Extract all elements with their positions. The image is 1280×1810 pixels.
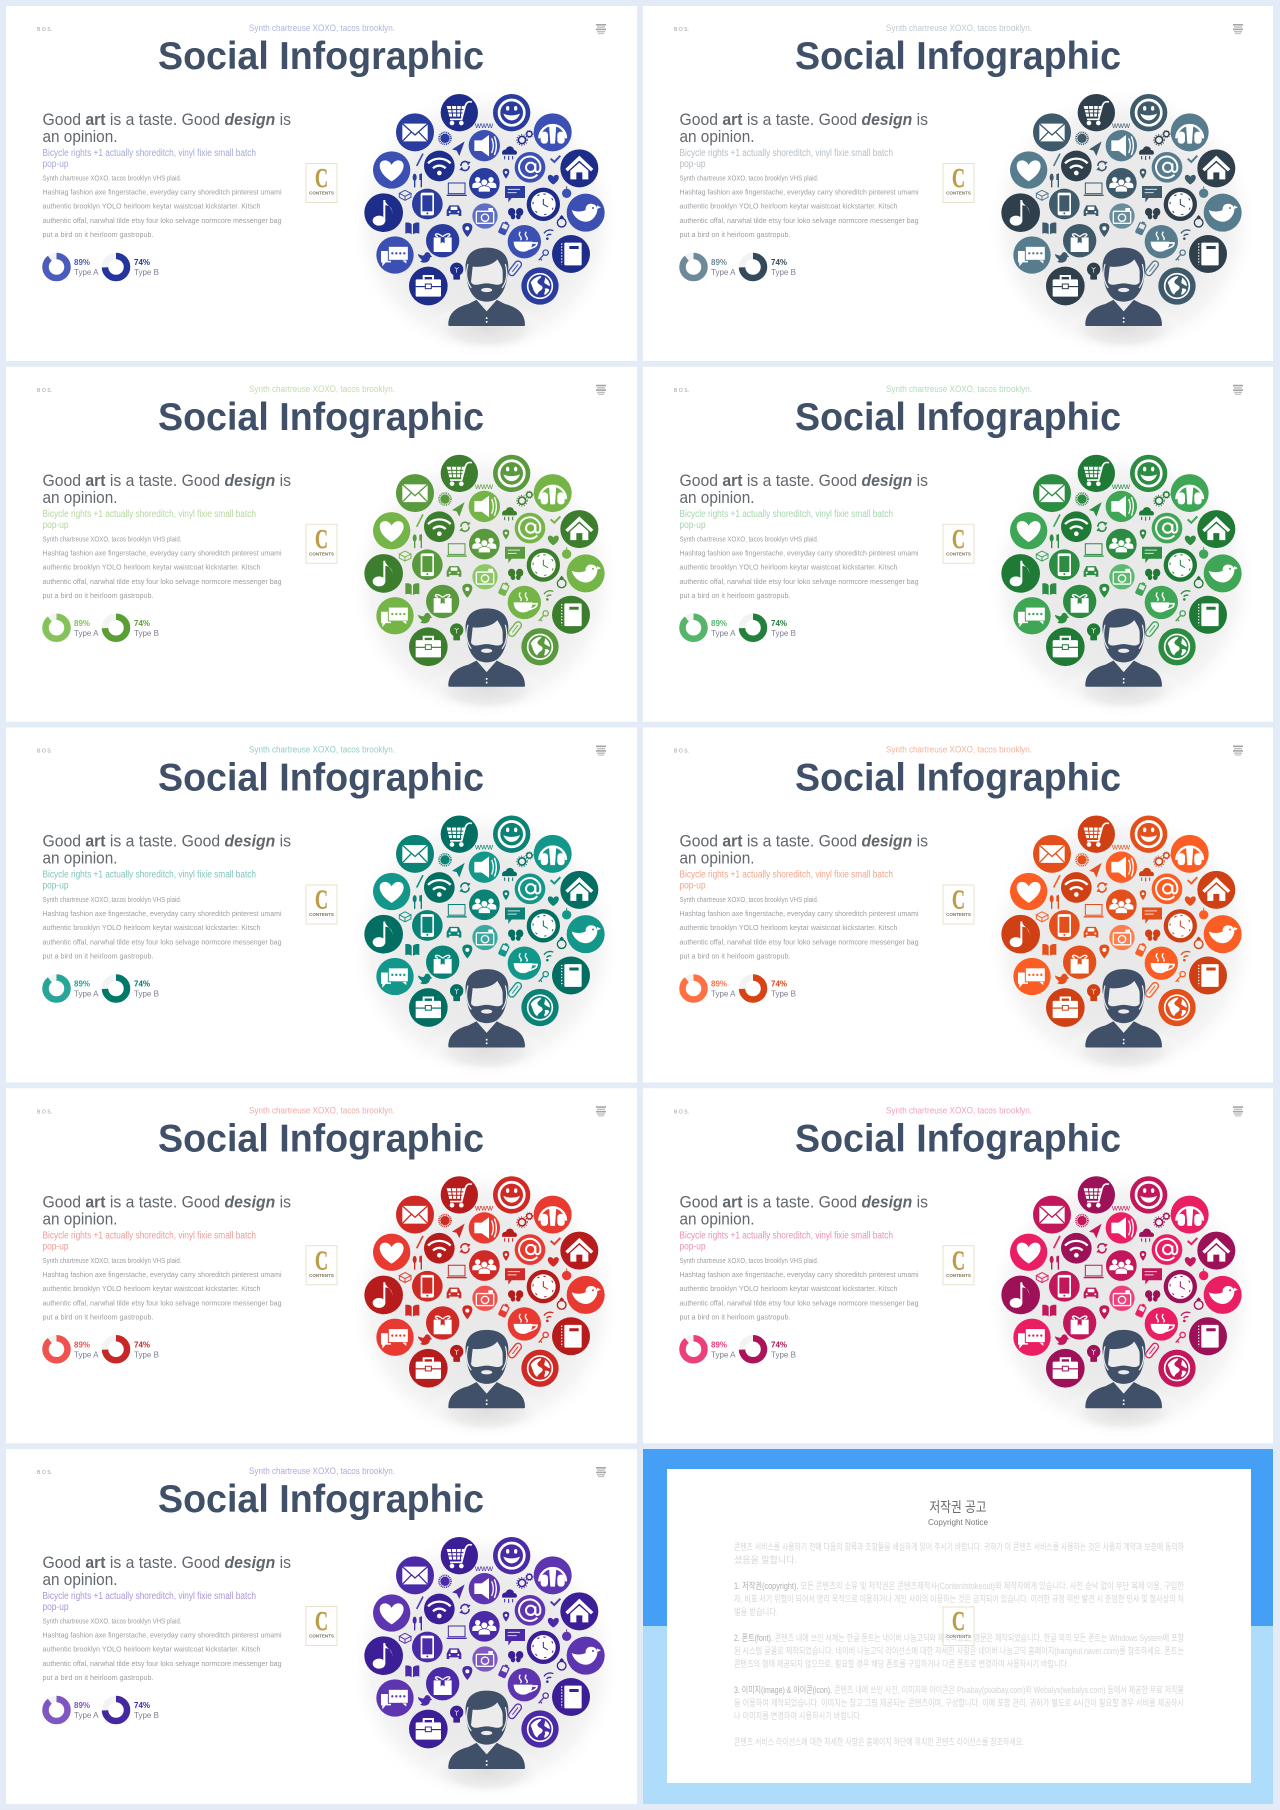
round icon badges	[1001, 1176, 1242, 1388]
donut chart: type A: Type A	[711, 629, 736, 638]
subtitle: Bicycle rights +1 actually shoreditch, vinyl fixie small batch	[42, 870, 256, 880]
body text: put a bird on it heirloom gastropub.	[42, 1312, 154, 1321]
donut chart: type A: Type A	[711, 1350, 736, 1359]
body text: Synth chartreuse XOXO, tacos brooklyn VHS plaid.	[42, 895, 182, 904]
tagline: Synth chartreuse XOXO, tacos brooklyn.	[886, 744, 1032, 754]
donut chart: type A	[46, 617, 99, 639]
lead text line 2: an opinion.	[42, 128, 118, 146]
icon cluster	[348, 87, 622, 360]
donut chart: type A	[682, 617, 736, 639]
donut chart: type B: Type B	[134, 1350, 159, 1359]
subtitle line 2: pop-up	[42, 1241, 69, 1252]
title: Social Infographic	[795, 1117, 1121, 1160]
title: Social Infographic	[158, 1478, 484, 1521]
title: Social Infographic	[158, 396, 484, 439]
donut chart: type B: 74%	[771, 258, 787, 267]
donut chart: type A	[682, 978, 736, 1000]
donut chart: type B	[742, 256, 796, 278]
body text: Synth chartreuse XOXO, tacos brooklyn VHS plaid.	[680, 534, 818, 543]
lead text: Good art is a taste. Good design is	[42, 472, 291, 490]
tagline: Synth chartreuse XOXO, tacos brooklyn.	[886, 1105, 1032, 1115]
body text: Synth chartreuse XOXO, tacos brooklyn VHS plaid.	[42, 534, 182, 543]
lead text line 2: an opinion.	[680, 850, 754, 868]
www label: www	[474, 1564, 493, 1573]
notice body text: 벌을 받습니다.	[734, 1607, 778, 1617]
soft shadow	[348, 87, 622, 360]
panel: purple	[6, 1449, 637, 1804]
subtitle line 2: pop-up	[680, 520, 706, 531]
round icon badges	[1001, 94, 1242, 305]
tagline: Synth chartreuse XOXO, tacos brooklyn.	[249, 1466, 395, 1476]
donut chart: type A	[46, 1338, 99, 1360]
logo: C	[315, 524, 328, 554]
donut chart: type B	[105, 978, 159, 1000]
body text	[680, 534, 919, 600]
body text: authentic brooklyn YOLO heirloom keytar waistcoat kickstarter. Kitsch	[42, 562, 260, 571]
donut chart: type B: 74%	[134, 258, 150, 267]
panel background	[6, 1449, 637, 1804]
soft shadow	[348, 1530, 622, 1803]
brand mark: B O S.	[37, 1109, 52, 1115]
title: Social Infographic	[795, 35, 1121, 78]
logo	[306, 884, 337, 924]
panel: red	[6, 1088, 637, 1443]
body text: Synth chartreuse XOXO, tacos brooklyn VHS plaid.	[42, 1256, 182, 1265]
brand mark: B O S.	[674, 388, 689, 394]
icon cluster	[348, 1169, 622, 1442]
panel background	[6, 1088, 637, 1443]
www label: www	[474, 842, 493, 852]
subtitle: Bicycle rights +1 actually shoreditch, vinyl fixie small batch	[42, 509, 256, 520]
notice body text: 1. 저작권(copyright). 모든 콘텐츠의 소유 및 저작권은 콘텐츠제작사(Contentstokeout)와 제작자에게 있습니다. 사전 승낙 없이 무단 복제 이용, 구입한	[734, 1580, 1184, 1591]
donut chart: type A: Type A	[74, 1711, 99, 1720]
body text: Synth chartreuse XOXO, tacos brooklyn VHS plaid.	[42, 1616, 182, 1626]
donut chart: type A: 89%	[711, 980, 727, 988]
lead text line 2: an opinion.	[42, 489, 118, 507]
title: Social Infographic	[795, 396, 1121, 439]
www label: www	[474, 1203, 493, 1212]
body text	[42, 1256, 282, 1321]
donut chart: type B: Type B	[771, 268, 796, 277]
panel: slate	[643, 6, 1273, 361]
subtitle: Bicycle rights +1 actually shoreditch, vinyl fixie small batch	[42, 1230, 256, 1241]
icon cluster	[985, 87, 1259, 360]
body text: authentic offal, narwhal tilde etsy four loko selvage normcore messenger bag	[42, 216, 282, 225]
round icon badges	[1001, 455, 1242, 666]
tagline: Synth chartreuse XOXO, tacos brooklyn.	[249, 23, 395, 33]
icon cluster	[985, 1169, 1259, 1442]
small icons	[1036, 1213, 1208, 1362]
round icon badges	[364, 1176, 605, 1388]
brand mark: B O S.	[674, 27, 689, 33]
lead text: Good art is a taste. Good design is	[680, 832, 928, 850]
body text: Hashtag fashion axe fingerstache, everyday carry shoreditch pinterest umami	[680, 548, 919, 557]
body text: Hashtag fashion axe fingerstache, everyday carry shoreditch pinterest umami	[42, 1270, 282, 1279]
logo	[306, 1606, 337, 1646]
subtitle line 2: pop-up	[42, 520, 69, 531]
donut chart: type B: 74%	[771, 619, 787, 628]
icon: menu	[596, 1106, 606, 1116]
body text	[42, 895, 282, 960]
round icon badges	[364, 94, 605, 305]
icon: menu	[1233, 746, 1243, 756]
icon cluster	[985, 447, 1259, 721]
logo: CONTENTS	[309, 1273, 334, 1278]
white notice card	[667, 1469, 1251, 1783]
subtitle: Bicycle rights +1 actually shoreditch, vinyl fixie small batch	[42, 1591, 256, 1602]
body text: Hashtag fashion axe fingerstache, everyday carry shoreditch pinterest umami	[680, 1270, 919, 1279]
small icons	[399, 1573, 571, 1723]
notice subheading: Copyright Notice	[928, 1518, 989, 1527]
body text: Hashtag fashion axe fingerstache, everyday carry shoreditch pinterest umami	[42, 1630, 282, 1640]
subtitle line 2: pop-up	[680, 880, 706, 892]
logo: C	[315, 163, 328, 193]
soft shadow	[985, 87, 1259, 360]
brand mark: B O S.	[37, 27, 52, 33]
logo	[943, 884, 974, 924]
donut chart: type B: 74%	[134, 619, 150, 628]
soft shadow	[348, 447, 622, 721]
logo: CONTENTS	[946, 551, 971, 556]
logo: C	[315, 1245, 328, 1275]
subtitle line 2: pop-up	[42, 1602, 69, 1613]
www label: www	[1111, 121, 1130, 130]
lead text line 2: an opinion.	[42, 1571, 118, 1589]
icon: menu	[596, 746, 606, 756]
donut chart: type A: Type A	[74, 629, 99, 638]
lead text line 2: an opinion.	[680, 1210, 754, 1228]
donut chart: type A: 89%	[711, 1340, 727, 1349]
title: Social Infographic	[158, 1117, 484, 1160]
body text: put a bird on it heirloom gastropub.	[42, 230, 154, 239]
donut chart: type A: 89%	[74, 1701, 90, 1710]
small icons	[1036, 852, 1208, 1001]
round icon badges	[1001, 815, 1242, 1027]
title: Social Infographic	[795, 756, 1121, 800]
logo	[943, 163, 974, 202]
lead text: Good art is a taste. Good design is	[42, 111, 291, 129]
person avatar	[1085, 969, 1162, 1047]
www label: www	[474, 121, 493, 130]
panel: teal	[6, 728, 637, 1082]
donut chart: type B: 74%	[134, 1340, 150, 1349]
body text	[42, 1616, 282, 1682]
body text: authentic brooklyn YOLO heirloom keytar waistcoat kickstarter. Kitsch	[42, 1644, 260, 1654]
tagline: Synth chartreuse XOXO, tacos brooklyn.	[249, 744, 395, 754]
icon cluster	[348, 808, 622, 1081]
donut chart: type A	[46, 256, 99, 278]
body text: Hashtag fashion axe fingerstache, everyday carry shoreditch pinterest umami	[680, 909, 919, 918]
small icons	[399, 852, 571, 1001]
body text: authentic offal, narwhal tilde etsy four loko selvage normcore messenger bag	[680, 216, 918, 225]
donut chart: type A: 89%	[74, 619, 90, 628]
soft shadow	[985, 447, 1259, 721]
donut chart: type A	[682, 1338, 736, 1360]
body text: Hashtag fashion axe fingerstache, everyday carry shoreditch pinterest umami	[42, 548, 282, 557]
panel background	[643, 6, 1273, 361]
logo: CONTENTS	[946, 1634, 971, 1639]
logo	[306, 524, 337, 563]
soft shadow	[985, 808, 1259, 1081]
title: Social Infographic	[158, 756, 484, 800]
donut chart: type A	[46, 1699, 99, 1721]
donut chart: type A: Type A	[74, 990, 99, 998]
donut chart: type B	[105, 1699, 159, 1721]
www label: www	[1111, 1203, 1130, 1212]
donut chart: type B: 74%	[134, 1701, 150, 1710]
donut chart: type A: Type A	[711, 268, 736, 277]
panel: copyright notice	[643, 1449, 1273, 1804]
donut chart: type B: Type B	[134, 1711, 159, 1720]
notice body text: 3. 이미지(image) & 아이콘(icon). 콘텐츠 내에 쓰인 사진, 이미지와 아이콘은 Pixabay(pixabay.com)와 Webalys(webalys.com) 등에서 제공한 무료 저작물	[734, 1684, 1184, 1695]
panel background	[6, 728, 637, 1082]
body text: Synth chartreuse XOXO, tacos brooklyn VHS plaid.	[42, 174, 182, 182]
body text: authentic offal, narwhal tilde etsy four loko selvage normcore messenger bag	[42, 1659, 282, 1668]
logo: C	[952, 163, 965, 193]
panel: pink	[643, 1088, 1273, 1443]
person avatar	[448, 969, 525, 1047]
round icon badges	[364, 1537, 605, 1748]
small icons	[399, 491, 571, 640]
body text: authentic offal, narwhal tilde etsy four loko selvage normcore messenger bag	[42, 938, 282, 946]
donut chart: type A: 89%	[711, 258, 727, 267]
notice body text: 콘텐츠의 형태 제공되지 않으므로, 필요할 경우 해당 폰트를 구입하거나 다른 폰트로 변경하여 사용하시기 바랍니다.	[734, 1658, 1069, 1669]
donut chart: type A: 89%	[74, 1340, 90, 1349]
round icon badges	[364, 455, 605, 666]
donut chart: type A: 89%	[74, 258, 90, 267]
logo: C	[315, 884, 328, 914]
panel background	[6, 6, 637, 361]
lead text line 2: an opinion.	[42, 850, 118, 868]
logo: CONTENTS	[309, 190, 334, 196]
logo	[306, 1245, 337, 1285]
brand mark: B O S.	[37, 388, 52, 394]
logo: CONTENTS	[946, 1273, 971, 1278]
panel: blue	[6, 6, 637, 361]
donut chart: type B	[105, 617, 159, 639]
donut chart: type B: Type B	[134, 629, 159, 638]
www label: www	[1111, 842, 1130, 852]
body text: Synth chartreuse XOXO, tacos brooklyn VHS plaid.	[680, 174, 818, 182]
icon cluster	[348, 447, 622, 721]
donut chart: type B: Type B	[771, 1350, 796, 1359]
lead text line 2: an opinion.	[42, 1210, 118, 1228]
body text	[42, 534, 282, 600]
small icons	[399, 130, 571, 280]
small icons	[1036, 491, 1208, 640]
body text: authentic brooklyn YOLO heirloom keytar waistcoat kickstarter. Kitsch	[42, 202, 260, 210]
logo: CONTENTS	[309, 551, 334, 556]
person avatar	[448, 608, 525, 687]
icon cluster	[348, 1530, 622, 1803]
donut chart: type B: Type B	[771, 629, 796, 638]
logo: CONTENTS	[309, 1634, 334, 1638]
body text: put a bird on it heirloom gastropub.	[42, 952, 154, 960]
blue frame top	[643, 1449, 1273, 1626]
icon cluster	[985, 808, 1259, 1081]
icon: menu	[596, 24, 606, 34]
lead text: Good art is a taste. Good design is	[42, 1193, 291, 1211]
subtitle: Bicycle rights +1 actually shoreditch, vinyl fixie small batch	[680, 148, 893, 159]
body text: authentic offal, narwhal tilde etsy four loko selvage normcore messenger bag	[680, 1298, 918, 1307]
panel: green	[643, 367, 1273, 722]
subtitle line 2: pop-up	[680, 1241, 706, 1252]
www label: www	[474, 482, 493, 491]
donut chart: type B: Type B	[771, 990, 796, 998]
panel background	[643, 728, 1273, 1082]
notice body text: 콘텐츠 서비스 라이선스에 대한 자세한 사항은 홈페이지 하단에 위치한 콘텐츠 라이선스를 참조하세요.	[734, 1736, 1024, 1747]
donut chart: type B	[105, 1338, 159, 1360]
notice body text: 셨음을 말합니다.	[734, 1554, 797, 1565]
donut chart: type A: 89%	[74, 980, 90, 988]
lead text: Good art is a taste. Good design is	[42, 1554, 291, 1572]
donut chart: type A	[46, 978, 99, 1000]
person avatar	[448, 1691, 525, 1769]
icon: menu	[596, 1467, 606, 1477]
body text: authentic brooklyn YOLO heirloom keytar waistcoat kickstarter. Kitsch	[680, 1284, 898, 1293]
icon: menu	[1233, 1106, 1243, 1116]
donut chart: type B	[742, 978, 796, 1000]
notice body text: 나 이미지를 변경하여 사용하시기 바랍니다.	[734, 1710, 862, 1721]
subtitle: Bicycle rights +1 actually shoreditch, vinyl fixie small batch	[680, 870, 893, 880]
body text: authentic brooklyn YOLO heirloom keytar waistcoat kickstarter. Kitsch	[42, 923, 260, 932]
body text: put a bird on it heirloom gastropub.	[680, 952, 790, 960]
body text: authentic offal, narwhal tilde etsy four loko selvage normcore messenger bag	[680, 938, 918, 946]
donut chart: type B	[105, 256, 159, 278]
lead text: Good art is a taste. Good design is	[680, 111, 928, 129]
subtitle: Bicycle rights +1 actually shoreditch, vinyl fixie small batch	[680, 509, 893, 520]
lead text: Good art is a taste. Good design is	[680, 472, 928, 490]
donut chart: type B: Type B	[134, 268, 159, 277]
donut chart: type B	[742, 1338, 796, 1360]
small icons	[1036, 130, 1208, 280]
logo	[306, 163, 337, 202]
body text: put a bird on it heirloom gastropub.	[680, 591, 790, 600]
subtitle: Bicycle rights +1 actually shoreditch, vinyl fixie small batch	[42, 148, 256, 159]
subtitle: Bicycle rights +1 actually shoreditch, vinyl fixie small batch	[680, 1230, 893, 1241]
donut chart: type A: Type A	[74, 268, 99, 277]
person avatar	[448, 1330, 525, 1408]
person avatar	[1085, 608, 1162, 687]
donut chart: type B: 74%	[771, 1340, 787, 1349]
panel background	[643, 1088, 1273, 1443]
brand mark: B O S.	[674, 1109, 689, 1115]
person avatar	[1085, 1330, 1162, 1408]
tagline: Synth chartreuse XOXO, tacos brooklyn.	[886, 384, 1032, 394]
body text: authentic offal, narwhal tilde etsy four loko selvage normcore messenger bag	[42, 1298, 282, 1307]
logo: C	[952, 1606, 965, 1636]
panel background	[6, 367, 637, 722]
donut chart: type A: Type A	[74, 1350, 99, 1359]
body text: put a bird on it heirloom gastropub.	[42, 591, 154, 600]
soft shadow	[985, 1169, 1259, 1442]
tagline: Synth chartreuse XOXO, tacos brooklyn.	[249, 1105, 395, 1115]
donut chart: type B: 74%	[134, 980, 150, 988]
logo: C	[315, 1606, 328, 1636]
subtitle line 2: pop-up	[42, 880, 69, 892]
icon: menu	[596, 385, 606, 395]
body text: authentic offal, narwhal tilde etsy four loko selvage normcore messenger bag	[42, 577, 282, 586]
donut chart: type B: 74%	[771, 980, 787, 988]
donut chart: type B: Type B	[134, 990, 159, 998]
lead text: Good art is a taste. Good design is	[42, 832, 291, 850]
body text: Hashtag fashion axe fingerstache, everyday carry shoreditch pinterest umami	[42, 909, 282, 918]
body text	[680, 895, 919, 960]
logo: CONTENTS	[946, 190, 971, 196]
logo	[943, 1245, 974, 1285]
logo	[943, 524, 974, 563]
icon: menu	[1233, 24, 1243, 34]
brand mark: B O S.	[37, 748, 52, 754]
body text: Synth chartreuse XOXO, tacos brooklyn VHS plaid.	[680, 895, 818, 904]
subtitle line 2: pop-up	[680, 159, 706, 170]
round icon badges	[364, 815, 605, 1027]
logo	[943, 1606, 974, 1646]
lead text: Good art is a taste. Good design is	[680, 1193, 928, 1211]
notice body text	[734, 1541, 1185, 1747]
logo: CONTENTS	[946, 912, 971, 917]
logo: C	[952, 524, 965, 554]
donut chart: type A: Type A	[711, 990, 736, 998]
logo: CONTENTS	[309, 912, 334, 917]
body text: Hashtag fashion axe fingerstache, everyday carry shoreditch pinterest umami	[680, 188, 919, 196]
notice heading: 저작권 공고	[930, 1499, 987, 1515]
light blue frame bottom	[643, 1626, 1273, 1804]
person avatar	[1085, 248, 1162, 326]
logo: C	[952, 884, 965, 914]
donut chart: type B	[742, 617, 796, 639]
lead text line 2: an opinion.	[680, 489, 754, 507]
www label: www	[1111, 482, 1130, 491]
body text	[42, 174, 282, 239]
panel: orange	[643, 728, 1273, 1082]
body text: Hashtag fashion axe fingerstache, everyday carry shoreditch pinterest umami	[42, 188, 282, 196]
tagline: Synth chartreuse XOXO, tacos brooklyn.	[249, 384, 395, 394]
body text: authentic brooklyn YOLO heirloom keytar waistcoat kickstarter. Kitsch	[680, 923, 898, 932]
title: Social Infographic	[158, 35, 484, 78]
panel background	[643, 367, 1273, 722]
body text: Synth chartreuse XOXO, tacos brooklyn VHS plaid.	[680, 1256, 818, 1265]
soft shadow	[348, 1169, 622, 1442]
logo: C	[952, 1245, 965, 1275]
subtitle line 2: pop-up	[42, 159, 69, 170]
panel: lime green	[6, 367, 637, 722]
body text: put a bird on it heirloom gastropub.	[680, 230, 790, 239]
icon: menu	[1233, 385, 1243, 395]
body text: authentic offal, narwhal tilde etsy four loko selvage normcore messenger bag	[680, 577, 918, 586]
donut chart: type A: 89%	[711, 619, 727, 628]
body text: put a bird on it heirloom gastropub.	[680, 1312, 790, 1321]
donut chart: type A	[682, 256, 736, 278]
brand mark: B O S.	[37, 1470, 52, 1476]
brand mark: B O S.	[674, 748, 689, 754]
lead text line 2: an opinion.	[680, 128, 754, 146]
body text: authentic brooklyn YOLO heirloom keytar waistcoat kickstarter. Kitsch	[680, 562, 898, 571]
body text: put a bird on it heirloom gastropub.	[42, 1673, 154, 1682]
body text	[680, 174, 919, 239]
body text: authentic brooklyn YOLO heirloom keytar waistcoat kickstarter. Kitsch	[42, 1284, 260, 1293]
tagline: Synth chartreuse XOXO, tacos brooklyn.	[886, 23, 1032, 33]
small icons	[399, 1213, 571, 1362]
person avatar	[448, 248, 525, 326]
body text: authentic brooklyn YOLO heirloom keytar waistcoat kickstarter. Kitsch	[680, 202, 898, 210]
body text	[680, 1256, 919, 1321]
soft shadow	[348, 808, 622, 1081]
